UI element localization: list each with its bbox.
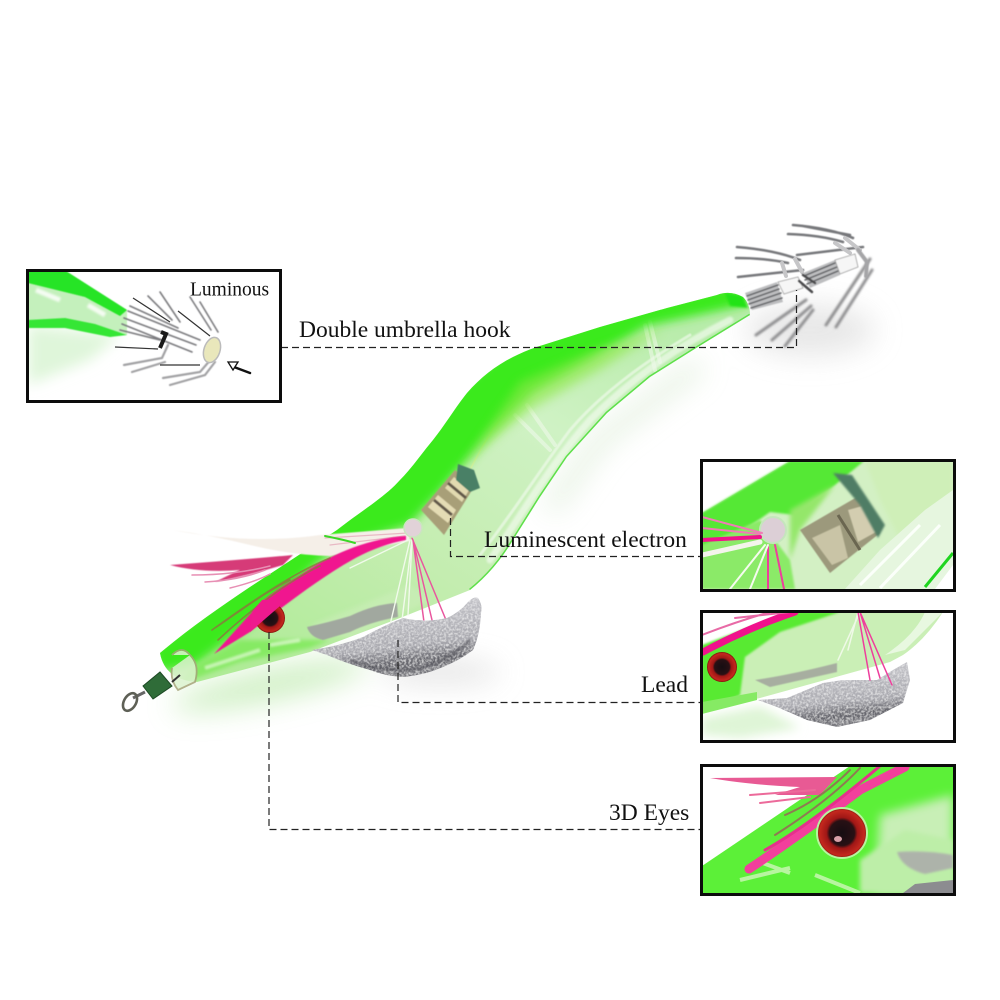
infographic canvas [26, 223, 956, 896]
leader line: lead [398, 640, 700, 702]
label: luminous: Luminous [190, 280, 269, 300]
hook collars and ribs [745, 250, 867, 310]
lower edge green line [470, 315, 750, 590]
squid hook [736, 225, 872, 346]
label: 3D eyes: 3D Eyes [609, 800, 689, 826]
leader line: 3D eyes [269, 632, 700, 830]
translucent streaks [470, 320, 730, 560]
inset panel: lead [702, 612, 954, 742]
leader line: double umbrella hook [281, 290, 796, 348]
lure body clipped detail [150, 285, 755, 684]
swivel [120, 672, 180, 713]
fine strands [350, 540, 412, 625]
inset panel: luminescent electron [702, 460, 954, 590]
green dorsal band [150, 285, 755, 672]
arrow [228, 362, 250, 373]
leader line: luminescent electron [450, 518, 700, 556]
head ring [172, 650, 197, 690]
lead blob inside body [307, 603, 398, 640]
magenta plume [214, 536, 406, 654]
label: luminescent electron: Luminescent electron [484, 527, 687, 553]
lead weight [312, 598, 482, 677]
LED battery [421, 464, 480, 535]
inset panel: luminous hook [28, 270, 280, 402]
label: lead: Lead [641, 672, 688, 698]
inset panel: 3D eyes [702, 766, 954, 894]
white plume [172, 528, 410, 556]
nose and belly highlights [196, 638, 328, 680]
feather [170, 528, 446, 654]
eye [250, 600, 285, 633]
red plume [170, 555, 293, 582]
main lure illustration [120, 225, 875, 721]
lure body [160, 293, 750, 682]
bead [404, 519, 422, 537]
label: double umbrella hook: Double umbrella hook [299, 317, 511, 343]
ground shadow [169, 304, 875, 721]
